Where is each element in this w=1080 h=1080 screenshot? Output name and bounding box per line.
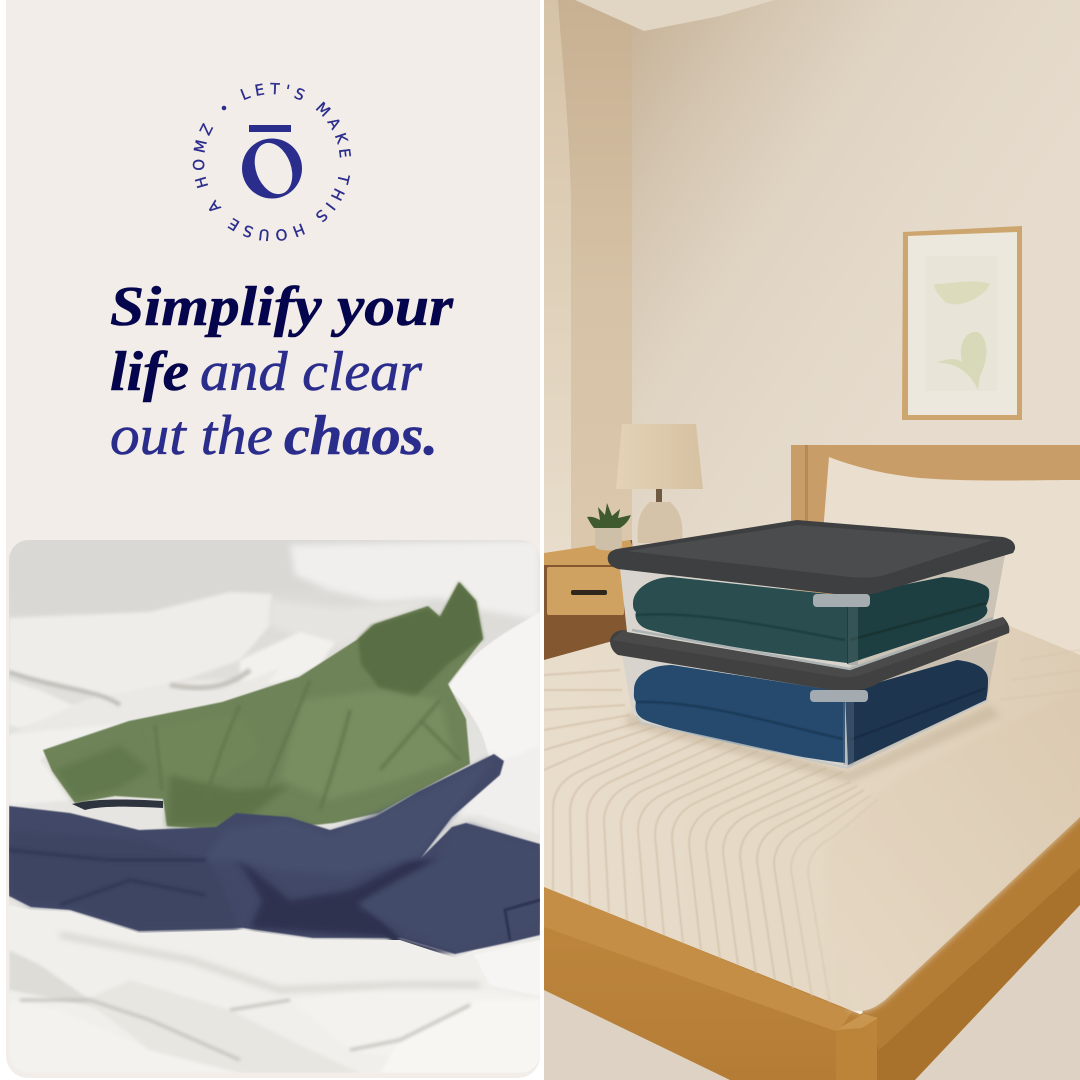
headline: chaos. [284,405,438,467]
navy trousers [9,754,540,954]
headline: life [110,341,189,403]
photo: messy bed with clothes [9,540,540,1073]
photo: tidy bedroom with storage boxes [544,0,1080,1080]
shadow under boxes [625,705,1000,782]
navy blanket [634,665,845,763]
black strap [72,799,163,810]
storage box: lower, navy blanket [610,617,1009,768]
lower lid [610,617,1009,692]
lower clip [810,690,868,702]
headline: out the [110,405,273,467]
rumpled white sheets, upper [9,540,540,835]
mattress ribs [544,650,1080,1003]
headline: Simplify your [110,276,454,338]
potted plant [587,503,631,550]
wall [632,0,1080,590]
headline [110,276,454,467]
table lamp [616,424,703,543]
mattress right side [844,817,1080,1016]
rumpled white sheets, lower [9,905,540,1073]
storage box: upper, green blanket [608,520,1015,670]
right rail [862,868,1080,1080]
headboard [791,445,1080,594]
headline: and clear [200,341,422,403]
logo: circular badge [192,82,352,242]
pillow [824,457,1080,645]
mattress [544,622,1080,1011]
ceiling [575,0,775,31]
panel: headline card [6,0,540,1078]
green blanket [633,577,847,663]
green shirt [43,582,483,829]
circular tagline: LET'S MAKE THIS HOUSE A HOMZ [192,82,352,242]
front rail [544,885,860,1080]
hood fold [358,582,483,698]
side wall [558,0,632,549]
framed botanical picture [902,226,1022,420]
floor [544,900,1080,1080]
corner post [836,1013,877,1080]
upper clip [813,594,870,607]
nightstand [544,540,640,660]
bed frame [544,800,1080,1080]
curtain [544,0,571,555]
upper lid [608,520,1015,595]
